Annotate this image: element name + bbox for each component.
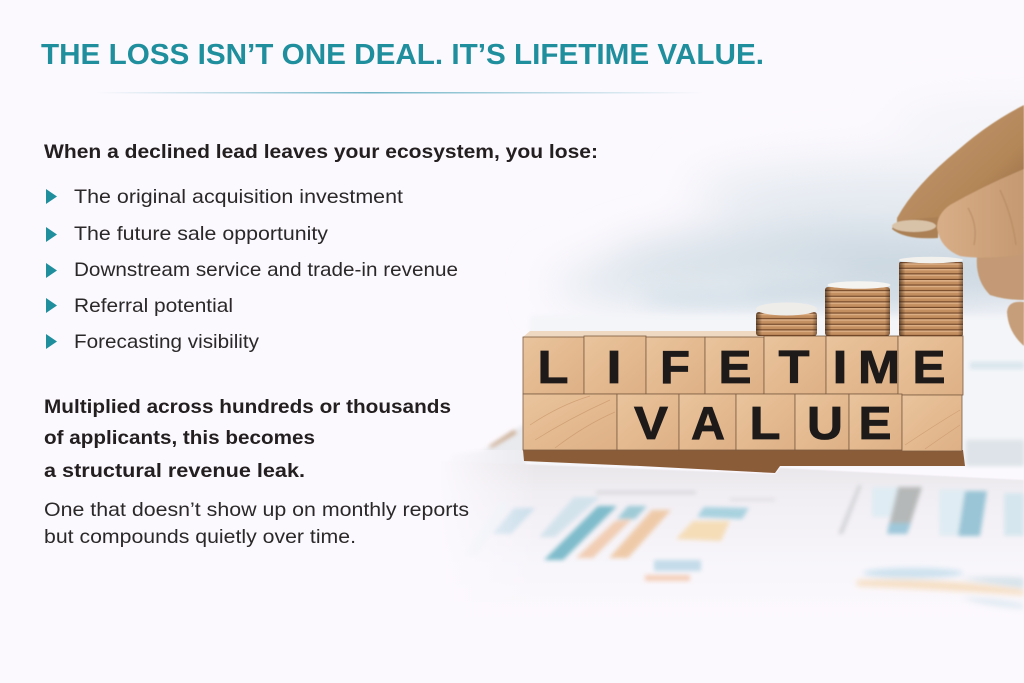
left fade of photo	[436, 450, 536, 635]
list item 1: The original acquisition investment	[74, 186, 404, 208]
block tops	[523, 331, 766, 337]
block letters: V	[634, 397, 668, 449]
text block: structural revenue leak: Multiplied across hundreds or thousands	[44, 396, 451, 418]
block letters: E	[718, 341, 752, 393]
block letters: L	[750, 397, 780, 449]
block letters: E	[912, 341, 946, 393]
list item 3: Downstream service and trade-in revenue	[74, 259, 458, 281]
block letters: A	[691, 397, 725, 449]
list: what you lose	[46, 186, 458, 353]
text block: lead-in: When a declined lead leaves your ecosystem, you lose:	[44, 141, 598, 163]
bottom row blocks	[523, 394, 962, 451]
block letters: U	[807, 397, 843, 449]
held coin	[892, 217, 938, 238]
block letters: I	[832, 341, 848, 393]
paper sheets	[440, 461, 1024, 625]
hand holding coin	[892, 105, 1024, 346]
right chart bars	[838, 485, 1024, 536]
background: blurred sky and water	[530, 109, 1024, 466]
coin stack 1	[756, 302, 817, 336]
text block: structural revenue leak	[44, 396, 451, 482]
table shadow under blocks	[523, 450, 965, 473]
bottom fade of photo	[430, 590, 1024, 630]
block letters: T	[778, 341, 810, 393]
block letters: E	[858, 397, 892, 449]
lower fingers	[977, 250, 1024, 300]
block letters: L	[538, 341, 568, 393]
text block: closing note: but compounds quietly over time.	[44, 526, 356, 548]
coin stack 2	[825, 281, 890, 336]
block wood grain	[530, 396, 960, 449]
water and table below the horizon	[530, 316, 1024, 466]
lower right chart bands	[857, 568, 1024, 610]
coin stack 3	[899, 257, 963, 336]
thumb	[937, 169, 1024, 258]
list item 2: The future sale opportunity	[74, 223, 328, 245]
block letters: I	[606, 341, 622, 393]
block letters: M	[858, 341, 900, 393]
block letters: F	[660, 341, 690, 393]
table edge	[450, 424, 526, 470]
left chart bars	[462, 491, 775, 581]
list item 5: Forecasting visibility	[74, 331, 259, 353]
top row blocks	[523, 336, 963, 395]
index finger	[897, 105, 1024, 224]
title: THE LOSS ISN’T ONE DEAL. IT’S LIFETIME VALUE.	[41, 39, 764, 71]
block letters	[538, 341, 946, 449]
coin stacks	[756, 257, 963, 336]
photo: papers with blurred charts	[430, 450, 1024, 635]
wooden blocks: LIFETIME VALUE	[523, 331, 963, 451]
text block: closing note: One that doesn’t show up on monthly reports	[44, 499, 469, 521]
text block: structural revenue leak: a structural revenue leak.	[44, 460, 305, 482]
title divider	[95, 92, 705, 94]
text block: structural revenue leak: of applicants, this becomes	[44, 427, 315, 449]
text block: closing note	[44, 499, 469, 548]
list item 4: Referral potential	[74, 295, 233, 317]
